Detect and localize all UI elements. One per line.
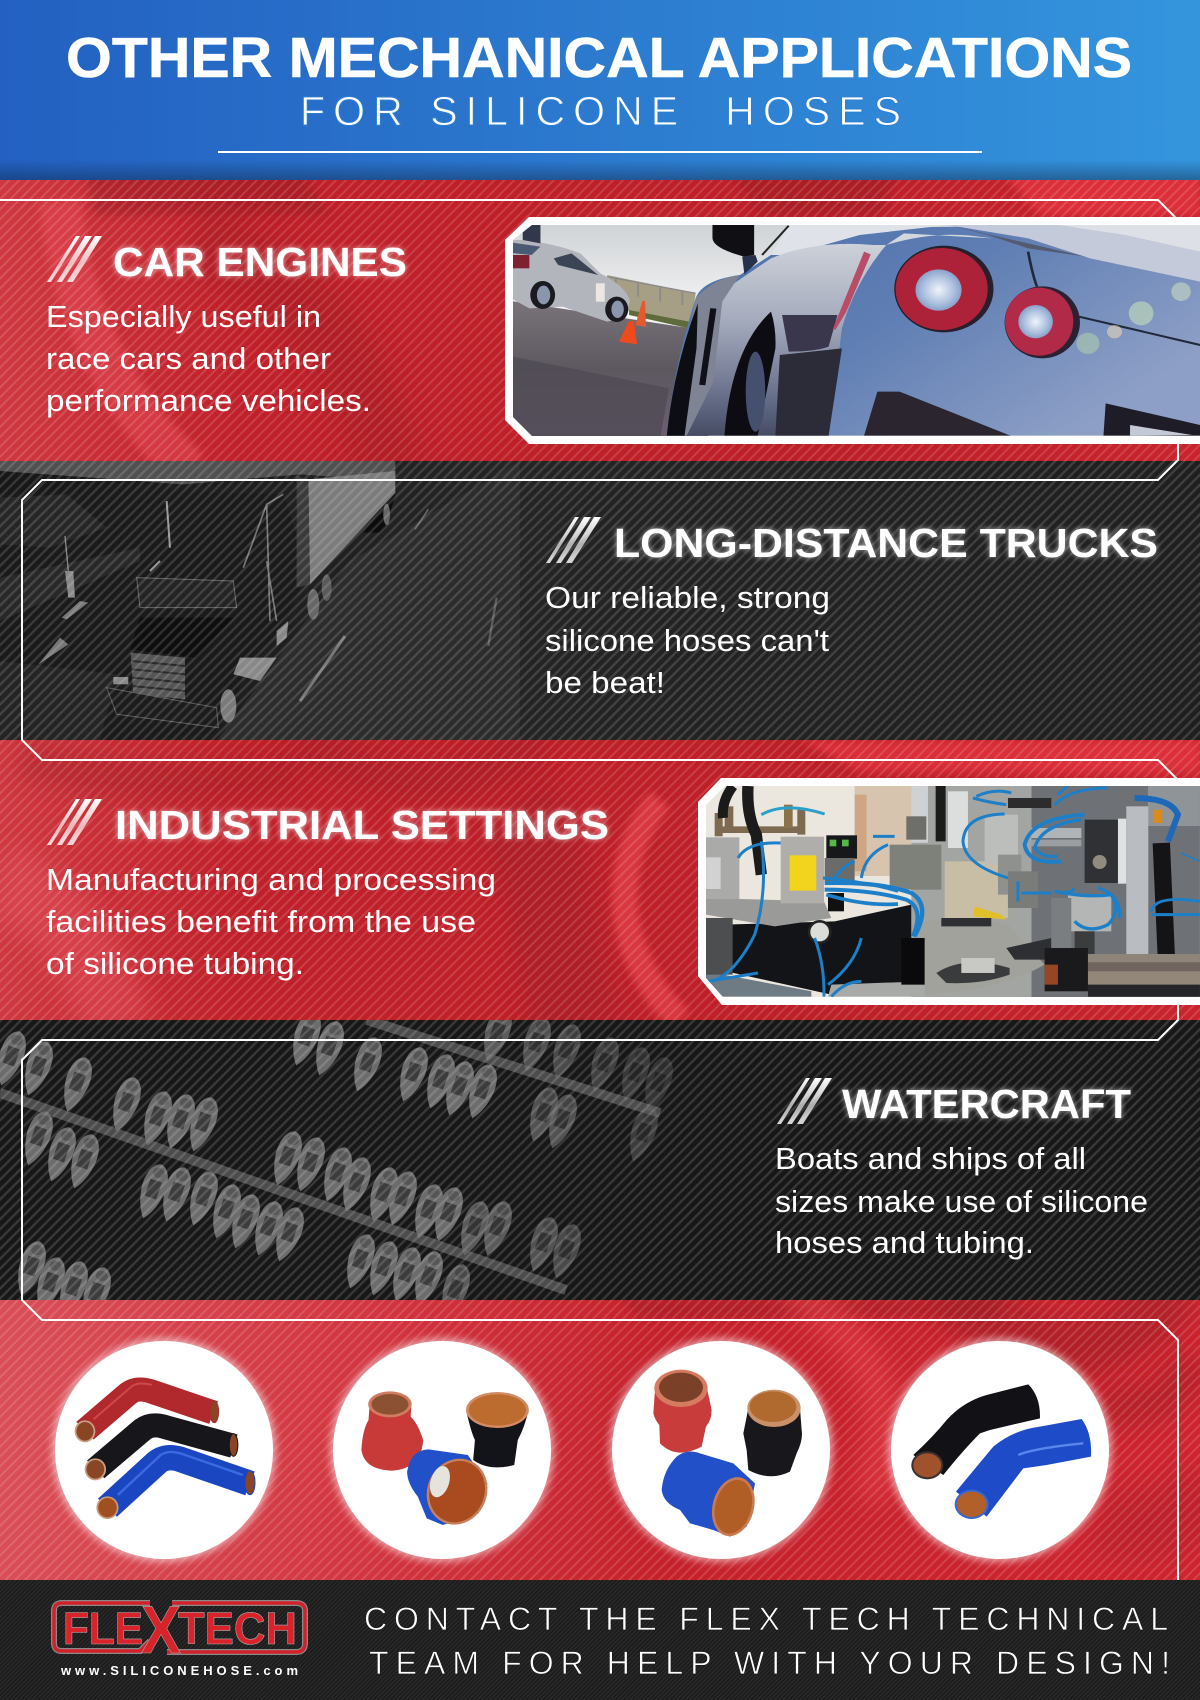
heading: CAR ENGINES <box>113 239 407 285</box>
subtitle: FOR SILICONE HOSES <box>300 88 901 134</box>
metal rods <box>1045 948 1088 991</box>
section: industrial settings text <box>46 799 609 981</box>
frame outline connecting panels <box>0 200 1178 1580</box>
body text: Boats and ships of all <box>775 1141 1086 1176</box>
dark housing <box>725 905 911 995</box>
blue hoses <box>708 786 1200 997</box>
logo: Flex Tech: X <box>141 1592 181 1668</box>
circle: reducer hoses <box>330 1338 554 1562</box>
icon: stripes <box>777 1078 832 1124</box>
icon: stripes <box>546 517 601 563</box>
body text <box>545 580 830 700</box>
circle: hump hoses <box>609 1338 833 1562</box>
footer band <box>0 1580 1200 1700</box>
circle: elbow hoses <box>52 1338 276 1562</box>
body text <box>775 1141 1148 1260</box>
main car body <box>667 225 1200 436</box>
section: watercraft text <box>775 1078 1148 1260</box>
product circles <box>52 1338 1112 1562</box>
panel background: car engines red band <box>0 170 1200 470</box>
photo: industrial machinery <box>698 778 1200 1008</box>
marina image <box>0 1020 673 1300</box>
section: car engines text <box>46 236 407 418</box>
body text: Our reliable, strong <box>545 580 830 615</box>
logo: Flex Tech: FLE <box>63 1603 143 1654</box>
website: www.SILICONEHOSE.com <box>60 1663 298 1678</box>
logo: Flex Tech: TECH <box>178 1603 297 1654</box>
body text: performance vehicles. <box>46 383 371 418</box>
body text: hoses and tubing. <box>775 1225 1034 1260</box>
title underline <box>218 151 982 153</box>
panel background: long-distance trucks dark band with truck image <box>0 461 1200 741</box>
truck image <box>0 461 520 741</box>
body text: race cars and other <box>46 341 331 376</box>
cones <box>619 321 637 344</box>
body text <box>46 862 496 981</box>
machine parts centre <box>890 845 941 890</box>
mirror <box>712 225 754 257</box>
panel background: watercraft dark band with marina image <box>0 1020 1200 1300</box>
gauge <box>809 921 830 943</box>
heading: INDUSTRIAL SETTINGS <box>115 802 609 848</box>
panel background: product strip red band <box>0 1290 1200 1580</box>
panel background: industrial settings red band <box>0 740 1200 1030</box>
body text: facilities benefit from the use <box>46 904 476 939</box>
body text: sizes make use of silicone <box>775 1184 1148 1219</box>
turntable <box>1031 960 1044 972</box>
small car <box>505 240 630 322</box>
body text: Manufacturing and processing <box>46 862 496 897</box>
call to action <box>364 1601 1170 1681</box>
call to action: TEAM FOR HELP WITH YOUR DESIGN! <box>369 1645 1170 1681</box>
tail lights <box>894 246 994 332</box>
circle: 45-degree elbow hoses <box>888 1338 1112 1562</box>
icon: stripes <box>47 236 102 282</box>
right block <box>1085 820 1121 883</box>
body text: silicone hoses can't <box>545 623 829 658</box>
title: OTHER MECHANICAL APPLICATIONS <box>66 26 1132 90</box>
lower reflections <box>864 392 1010 436</box>
body text <box>46 299 371 418</box>
section: long-distance trucks text <box>545 517 1158 700</box>
icon: stripes <box>47 799 102 845</box>
cylinders <box>706 837 739 899</box>
logo: Flex Tech <box>54 1592 305 1678</box>
header banner <box>0 0 1200 180</box>
body text: Especially useful in <box>46 299 321 334</box>
black hoses <box>723 786 733 818</box>
body text: be beat! <box>545 665 665 700</box>
lens flare <box>1110 297 1159 333</box>
body text: of silicone tubing. <box>46 946 304 981</box>
heading: LONG-DISTANCE TRUCKS <box>614 520 1158 566</box>
photo: car at race track <box>505 217 1200 444</box>
call to action: CONTACT THE FLEX TECH TECHNICAL <box>364 1601 1168 1637</box>
heading: WATERCRAFT <box>842 1081 1131 1127</box>
